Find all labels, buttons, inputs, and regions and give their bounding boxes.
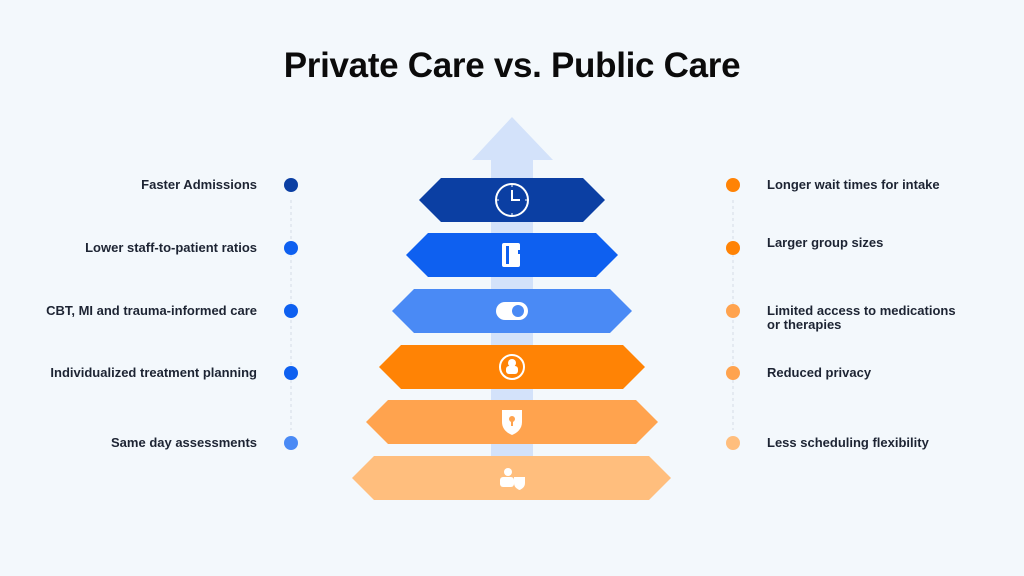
item: CBT, MI and trauma-informed care — [46, 303, 257, 318]
item: or therapies — [767, 317, 841, 332]
arrow — [472, 117, 553, 470]
left: private care items — [46, 177, 257, 450]
bar 6 — [352, 456, 671, 500]
item: Lower staff-to-patient ratios — [85, 240, 257, 255]
bar 2 — [406, 233, 618, 277]
right: public care items — [767, 177, 956, 450]
item — [767, 303, 956, 332]
item: Less scheduling flexibility — [767, 435, 929, 450]
item: Same day assessments — [111, 435, 257, 450]
title: Private Care vs. Public Care — [284, 46, 740, 85]
item: Reduced privacy — [767, 365, 871, 380]
left dots — [284, 178, 298, 450]
bar 4 — [379, 345, 645, 389]
right dots — [726, 178, 740, 450]
item: Larger group sizes — [767, 235, 883, 250]
item: Longer wait times for intake — [767, 177, 940, 192]
item: Limited access to medications — [767, 303, 956, 318]
bar 3 — [392, 289, 632, 333]
bar 1 — [419, 178, 605, 222]
item: Faster Admissions — [141, 177, 257, 192]
bar 5 — [366, 400, 658, 444]
dashed connectors — [291, 200, 733, 430]
item: Individualized treatment planning — [50, 365, 257, 380]
